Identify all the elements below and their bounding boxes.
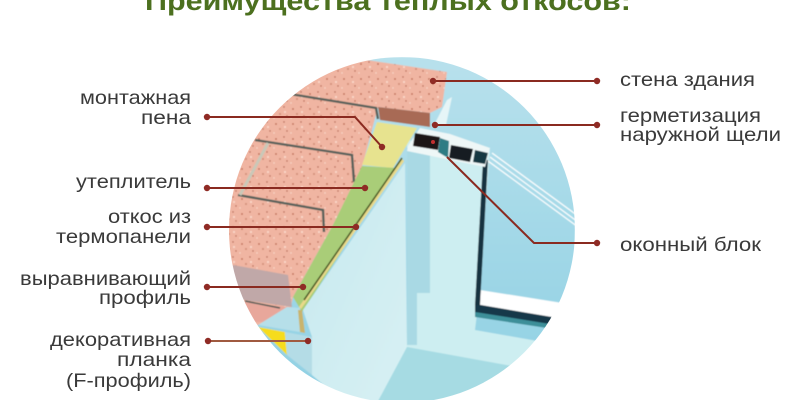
leader: монтажная пена (207, 117, 382, 147)
mounting foam (362, 122, 417, 168)
gold strip (298, 310, 305, 333)
brown slab (378, 107, 430, 127)
leader: откос (207, 226, 356, 228)
label: декоративная планка (F-профиль): (F-профиль) (66, 370, 191, 392)
white window sill (479, 290, 560, 318)
dark frame line (475, 160, 488, 305)
label: герметизация наружной щели (620, 105, 781, 146)
lower blue block (285, 332, 312, 375)
label: утеплитель: утеплитель (76, 171, 191, 193)
leader lines (207, 81, 597, 341)
label: монтажная пена: пена (141, 107, 191, 129)
label: стена здания: стена здания (620, 69, 755, 91)
leader: оконный блок (447, 157, 597, 243)
leader: выравнивающий профиль (207, 286, 303, 288)
leader: декоративная планка (208, 340, 308, 342)
label: откос из термопанели: откос из (108, 206, 191, 228)
bricks (225, 60, 447, 325)
label: откос из термопанели: термопанели (56, 226, 191, 248)
left wall reveal panel (303, 163, 407, 400)
label: откос из термопанели (56, 206, 191, 248)
insulation (293, 166, 396, 312)
right window wall (406, 140, 536, 366)
window profile (407, 128, 490, 167)
floor (378, 347, 510, 400)
label: декоративная планка (F-профиль): декоративная (50, 329, 191, 351)
mortar joints (238, 94, 378, 232)
label: декоративная планка (F-профиль): планка (117, 349, 191, 371)
label: оконный блок: оконный блок (620, 234, 762, 256)
right labels (620, 69, 781, 256)
glass reflection lines (488, 153, 578, 227)
white area beyond the brick top (434, 97, 452, 125)
leader: утеплитель (207, 187, 365, 189)
reveal edge strips (300, 160, 403, 308)
teal lower sash (475, 312, 550, 328)
label: выравнивающий профиль: выравнивающий (20, 268, 191, 290)
label: герметизация наружной щели: герметизация (620, 105, 761, 127)
leader: герметизация (435, 124, 597, 126)
label: выравнивающий профиль (20, 268, 191, 309)
label: выравнивающий профиль: профиль (99, 287, 191, 309)
light blue block (258, 307, 300, 332)
yellow block (258, 327, 287, 355)
frame column (407, 148, 430, 345)
leader: стена здания (433, 80, 597, 82)
lower pink brick (245, 302, 286, 322)
diagram: window reveal cross-section (225, 57, 600, 400)
lower grey brick (225, 265, 292, 307)
glass and sky background (257, 57, 575, 384)
dark lower sash (475, 304, 552, 325)
label: декоративная планка (F-профиль) (50, 329, 191, 392)
label: герметизация наружной щели: наружной щели (620, 124, 781, 146)
leader dots (204, 78, 600, 344)
left labels (20, 87, 191, 392)
label: монтажная пена (80, 87, 191, 129)
label: монтажная пена: монтажная (80, 87, 191, 109)
